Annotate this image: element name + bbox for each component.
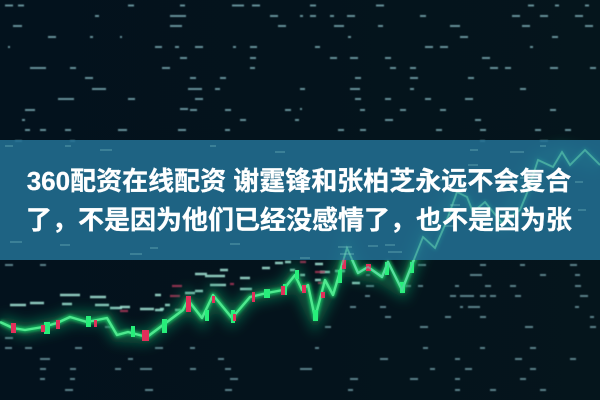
green glow under chart line [0,152,600,337]
candlestick wicks and price line [0,150,600,337]
data readout marks, upper area [5,6,596,141]
green candles [44,262,414,337]
title: 了，不是因为他们已经没感情了，也不是因为张 [26,205,572,235]
red labels above the chart line [120,262,326,311]
pale teal labels above the chart line [10,262,360,310]
data readout marks, lower area [5,265,596,390]
faint chart and labels seen through the band [5,145,600,292]
title [26,166,572,235]
red candles [11,258,371,341]
translucent title band [0,140,600,260]
title: 360配资在线配资 谢霆锋和张柏芝永远不会复合 [27,166,571,196]
